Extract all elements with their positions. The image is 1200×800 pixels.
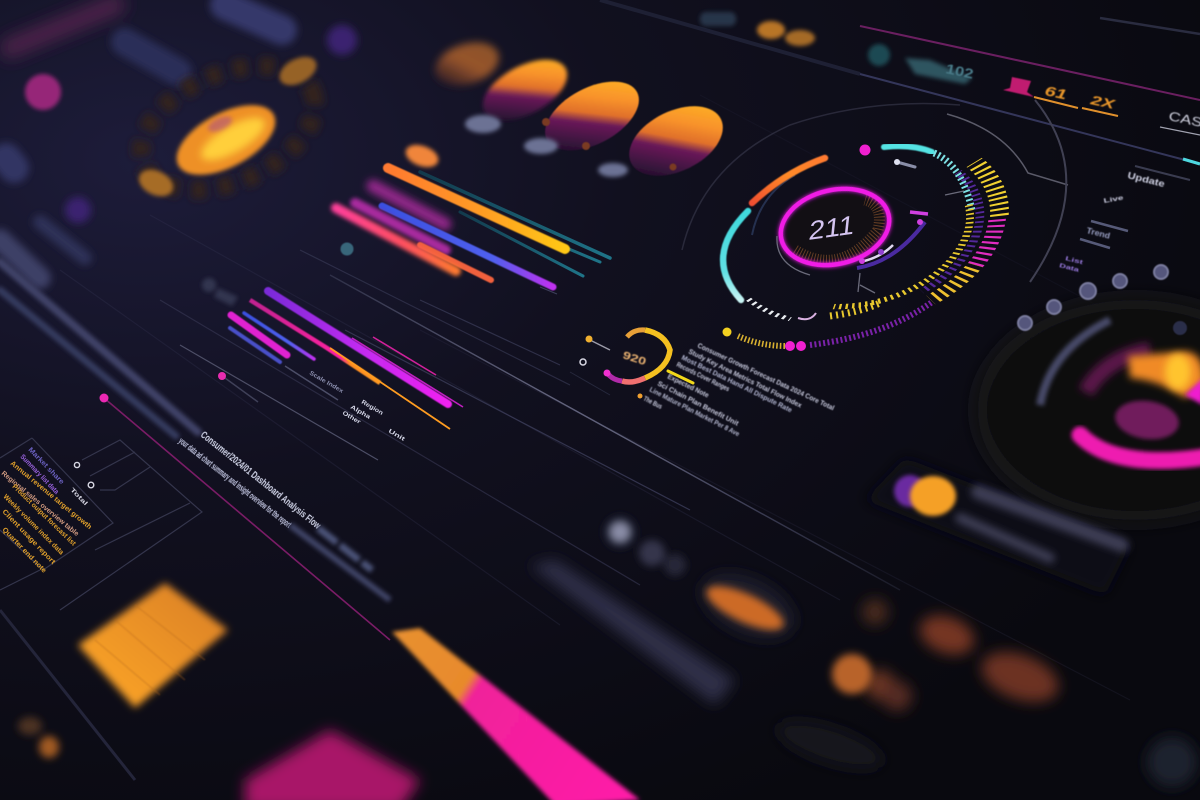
panel rows: Quarter end note [1,527,47,575]
right large donut [980,302,1200,518]
donut marker [580,359,586,365]
gauge caption text: Consumer Growth Forecast Data 2024 Core Total [696,342,835,412]
label icon text: Update [1127,170,1166,189]
gauge inner thin marks [777,191,964,293]
label text: Unit [387,429,406,443]
magenta marker [218,372,226,380]
magenta bottom arc [1080,435,1200,461]
gauge centre disc [778,184,894,274]
status white underline [1160,127,1200,135]
cyan top arc [884,146,932,152]
text line one blur tail [318,528,372,570]
thin magenta lines [352,337,463,407]
dome label dots [542,118,676,170]
magenta status line [860,26,1200,100]
gauge caption text: Sci Chain Plan Benefit Unit [656,381,740,428]
label text: Alpha [349,405,372,421]
magenta divider line [104,398,390,640]
dome one [429,35,505,93]
blue-purple bar [382,206,553,287]
status orange underlines [1034,97,1118,116]
donut arc orange [627,330,645,337]
donut arc pink [622,378,645,382]
donut outer dim ring [980,302,1200,518]
blurred pill legend [865,458,1130,595]
panel rows: Product output forecast list [11,483,77,548]
bottom yellow ticks [738,336,786,346]
magenta top dot [860,144,870,156]
pink orange bar 1 [420,245,491,280]
orange-yellow bar [388,168,565,249]
teal dot [340,242,354,256]
dome labels [465,115,628,177]
inner pill [897,162,915,167]
cyan left arc [723,211,748,300]
caption yellow highlight [668,371,693,383]
donut arc yellow [645,330,670,378]
panel rows: Regional sales overview table [0,470,80,538]
white glyph cluster [798,313,816,319]
gauge caption text: Study Key Area Metrics Total Flow Index [687,349,803,410]
bottom yellow dot [722,328,732,336]
tick rings [746,158,1009,321]
status teal text: 102 [944,60,975,82]
trend text: Trend [1086,226,1111,241]
right side small labels [1059,166,1190,274]
text line one: Consumer/2024/01 Dashboard Analysis Flow [198,430,322,532]
orange top arc [752,158,825,203]
pink dot [25,74,61,110]
grey arc [1040,320,1110,405]
gauge value: 211 [807,209,856,246]
yellow taper [330,348,450,429]
cyan ticks [934,153,972,210]
gauge disc texture [795,200,879,260]
lower blurred chips [530,559,1197,787]
far text smears [0,262,198,436]
gauge caption text: Most Best Data Hand All Dispute Rate [680,355,793,414]
bottom magenta dots [785,341,806,351]
dial dim dots rim [122,41,334,215]
panel markers [74,462,94,488]
pink orange bar 2 [336,208,456,271]
label text [308,371,406,443]
dome two [473,47,577,133]
panel rows [0,447,93,575]
magenta divider dot [100,394,108,402]
orange arc [1128,352,1200,398]
pill orange circle [910,476,956,516]
magenta corner [1185,378,1200,405]
short blue bar [230,328,280,362]
status row blurred chips [700,12,972,84]
yellow highlight [1165,354,1191,390]
upper bar chart [336,141,610,294]
grey axis lines [225,366,338,402]
panel rows: Weekly volume index data [2,493,65,556]
lower bar chart [202,278,463,443]
top-right status row [700,12,1200,135]
purple list text: List [1065,256,1083,266]
pill purple circle [894,475,926,507]
trend bars [1080,221,1128,248]
magenta to yellow bar [250,300,380,383]
lower purple tick band [810,302,932,345]
radial gauge [682,100,1068,355]
label text: Region [360,400,384,417]
status readout text: 61 [1043,82,1069,103]
status magenta chip [1003,77,1034,97]
donut key [590,340,610,350]
caption orange chip [638,394,642,398]
donut arc magenta [608,374,622,381]
lower sharper chips [604,516,872,694]
pink blurred card [245,730,420,800]
long text block [177,430,390,600]
centre pink ellipse [1113,397,1181,443]
orange blob [403,141,441,171]
short blue-purple bar [244,313,314,359]
label text: Scale Index [308,371,345,395]
pill blur text [960,492,1122,558]
donut value: 920 [621,349,648,368]
orange blurred card [78,583,228,708]
dial core [166,91,286,189]
panel rows: Annual revenue target growth [9,460,93,531]
orange blurred dial [122,41,334,215]
dome three [534,67,650,165]
gauge caption text: The Bus [642,396,663,411]
pink bar mid [355,203,446,250]
small label: Live [1103,195,1125,205]
outer thin arcs [682,100,1068,282]
magenta ring [773,179,897,275]
text line two: your data ad chart summary and insight overview for the report [177,436,293,530]
purple to magenta bar [268,291,448,404]
lower yellow ticks extension [830,303,880,316]
gauge inner violet cluster [857,212,928,268]
panel rows: Summary list data [19,454,60,496]
gauge caption text: Line Mature Plan Market Per 8 Ave [648,387,740,438]
pink upper arc [1086,350,1150,392]
dial core highlight [195,110,271,168]
purple dots [65,25,357,223]
gauge caption text: Expected Note [666,374,710,400]
left data panel [0,438,202,610]
gauge caption text [642,342,835,438]
panel rows: Market share [27,447,65,486]
label rule [1135,166,1190,180]
dial outer dots [135,165,177,201]
panel rows: Client usage report [1,509,57,566]
teal bars [420,172,610,276]
right dots row [1018,265,1187,335]
pill panel [865,458,1130,595]
small donut widget [570,330,670,395]
panel rows: Total [69,487,89,508]
thin line under bars [540,287,557,294]
blurred top-left pills [0,5,282,278]
dome gauges row [429,35,734,190]
panel outer lines [0,438,202,610]
magenta blurred bar [373,186,445,224]
top-right status row: 2X [1088,92,1118,112]
bottom-left small blur [18,717,59,758]
gradient long bar [392,628,640,800]
purple list text [1059,256,1083,274]
short magenta bar [231,315,287,355]
text line two blur tail [290,525,390,600]
label text: Other [341,411,362,426]
gauge caption text: Records Cover Ranges [675,362,730,393]
status white text: CAS [1167,108,1200,130]
dome four [618,92,734,190]
cyan line end [1183,159,1200,164]
card stripes [95,605,205,695]
blurred labels [202,278,238,306]
dial magenta patch [206,113,234,135]
purple list text: Data [1059,263,1080,274]
